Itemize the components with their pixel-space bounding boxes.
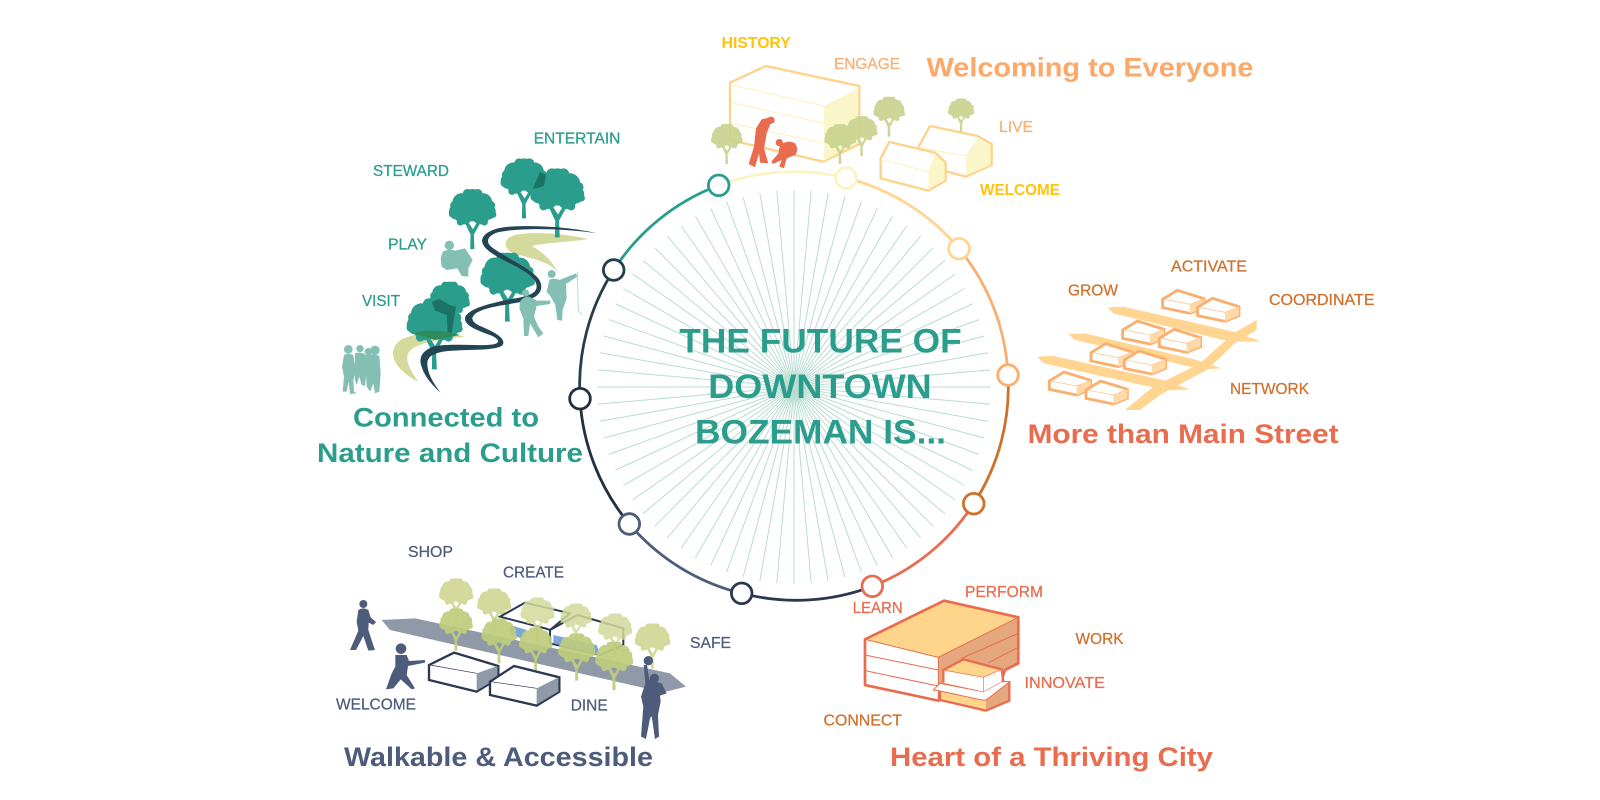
labels: WORK xyxy=(1076,631,1124,648)
labels: LEARN xyxy=(853,600,903,617)
central title xyxy=(679,323,962,451)
labels: DINE xyxy=(571,698,608,715)
labels: NETWORK xyxy=(1230,381,1310,398)
illustration: street, buildings, trees and people xyxy=(350,578,686,739)
central title: BOZEMAN IS... xyxy=(695,413,946,451)
labels: VISIT xyxy=(362,293,401,310)
illustration: large and small buildings xyxy=(865,601,1018,711)
illustration: street grid and buildings xyxy=(1037,290,1262,410)
central title: DOWNTOWN xyxy=(708,368,932,406)
labels: CREATE xyxy=(503,565,564,582)
illustration: buildings, trees and people xyxy=(711,66,992,191)
illustration: trail, trees and people xyxy=(342,158,597,394)
labels: WELCOME xyxy=(336,697,416,714)
heading: Connected to xyxy=(353,402,539,432)
labels xyxy=(336,544,731,715)
panel: welcoming to everyone xyxy=(711,35,1254,199)
labels: SAFE xyxy=(690,635,731,652)
labels: STEWARD xyxy=(373,163,449,180)
labels: LIVE xyxy=(999,119,1033,136)
labels: ENTERTAIN xyxy=(534,130,620,147)
panel: more than main street xyxy=(1028,258,1374,449)
heading: Nature and Culture xyxy=(317,438,583,468)
labels xyxy=(1068,258,1374,398)
panel: connected to nature and culture xyxy=(317,130,620,468)
heading: Walkable & Accessible xyxy=(344,742,653,772)
labels: ACTIVATE xyxy=(1171,258,1247,276)
labels xyxy=(362,130,620,310)
radial sunburst rays xyxy=(597,190,991,584)
labels: PLAY xyxy=(388,237,427,254)
labels: GROW xyxy=(1068,283,1118,300)
labels xyxy=(722,35,1060,199)
labels: HISTORY xyxy=(722,35,791,52)
heading xyxy=(317,402,583,468)
heading: Heart of a Thriving City xyxy=(890,742,1213,772)
central title: THE FUTURE OF xyxy=(679,323,962,361)
panel: walkable and accessible xyxy=(336,544,731,772)
panel: heart of a thriving city xyxy=(824,584,1213,772)
labels: WELCOME xyxy=(980,182,1060,199)
heading: Welcoming to Everyone xyxy=(926,52,1254,82)
labels: ENGAGE xyxy=(834,56,900,73)
labels: INNOVATE xyxy=(1024,675,1105,692)
heading: More than Main Street xyxy=(1028,419,1339,449)
labels: CONNECT xyxy=(824,712,903,730)
labels: SHOP xyxy=(408,544,453,561)
circular ring with nodes xyxy=(570,168,1018,604)
labels: COORDINATE xyxy=(1269,292,1374,309)
labels xyxy=(824,584,1124,730)
labels: PERFORM xyxy=(965,584,1043,601)
